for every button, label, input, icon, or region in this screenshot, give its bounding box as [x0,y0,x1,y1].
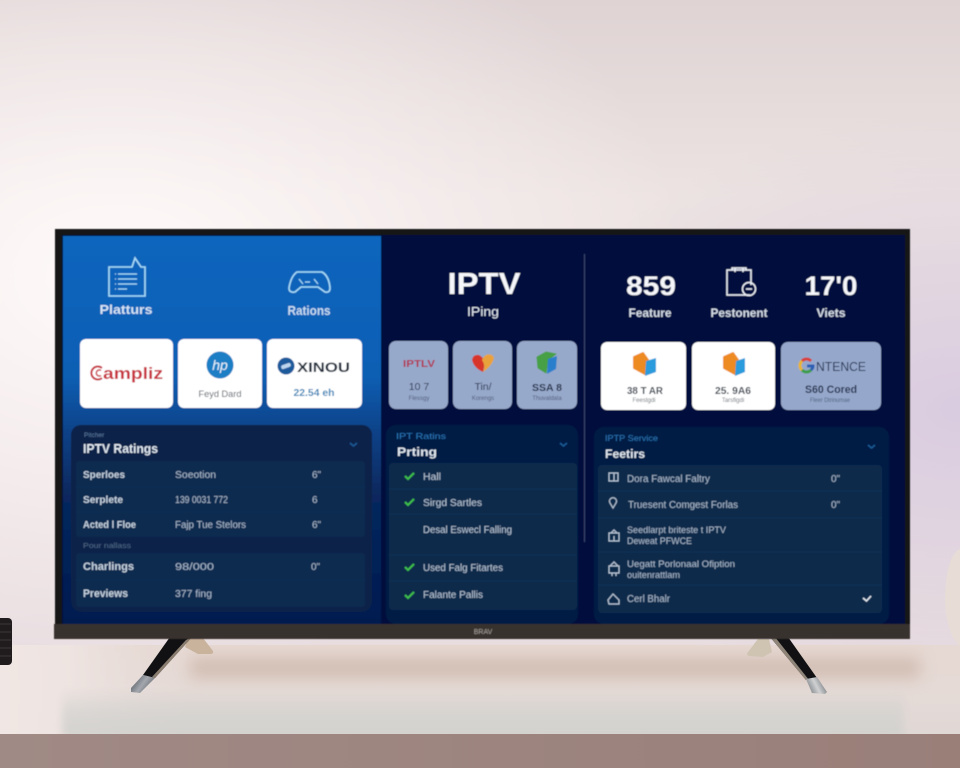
card: G NTENCE [781,342,881,410]
checklist: Used Falg Fitartes [423,563,503,574]
card: G NTENCE: S60 Cored [805,384,857,396]
label: Platfurs: Platturs [100,302,152,317]
subheading: IPing: IPing [467,304,499,319]
feature text: 0" [831,474,841,485]
table: bottom rows: Previews [83,588,128,600]
card: camplitz: ampliz [103,365,163,383]
bottom bezel strip [54,624,910,639]
label: Pestonent: Pestonent [710,306,768,320]
panel: features [594,427,889,624]
table: top rows: 6" [312,470,322,481]
card: orange logo 1: Feestgdi [632,398,656,404]
left blue column [63,236,381,624]
feature text: Cerl Bhalr [627,594,671,605]
table: bottom rows: 0" [311,562,321,573]
panel eyebrow: IPTP Service [605,433,658,443]
card: G NTENCE: NTENCE [816,360,866,374]
TV bezel [55,229,910,639]
card: blue globe logo [178,339,262,408]
table: top rows [76,461,365,537]
feature text: ouitenrattlam [627,570,680,581]
card: IPTV 107 [389,341,448,409]
panel eyebrow: IPT Ratins [396,431,446,441]
card: heart logo: Korengs [472,396,494,402]
card: green logo [517,341,577,409]
checklist: Hall [423,472,441,483]
panel: pricing [386,425,578,624]
feature text: Uegatt Porlonaal Ofiption [627,559,735,570]
white vase, right [945,549,960,646]
table: top rows: Fajp Tue Stelors [175,520,246,531]
left TV leg [131,637,213,693]
speaker puck, left [0,618,12,665]
table: top rows: Acted l Floe [83,519,136,531]
table: bottom rows: Charlings [83,561,134,573]
card: XINOU: XINOU [297,359,350,375]
feature text [627,474,841,605]
icon: platforms list [109,258,145,296]
table: top rows: Sperloes [83,469,125,481]
icon: game controller [289,272,330,292]
table: top rows: Serplete [83,494,123,506]
card: blue globe logo: Feyd Dard [198,389,242,399]
card: orange logo 2 [692,342,775,410]
stat: 17'0 Viets: Viets [816,306,846,320]
panel heading: IPTV Ratings [83,442,158,456]
divider line in screen [584,254,585,542]
card: heart logo [453,341,512,409]
TV set [54,229,910,639]
stat: 859 Feature [626,271,676,320]
checklist: Sirgd Sartles [423,498,482,509]
table: top rows: Soeotion [175,470,216,481]
checklist: Falante Pallis [423,590,483,601]
card: camplitz [80,339,173,408]
chevron [350,443,357,446]
panel: IPTV ratings [71,425,372,612]
card: orange logo 2: 25. 9A6 [715,386,751,397]
chevron [560,443,567,446]
checklist: Desal Eswecl Falling [423,525,512,536]
stat: 859 Feature: Feature [628,306,672,320]
TV brand label: BRAV [474,629,493,636]
card: G NTENCE: Fleer Dtrinumae [810,398,851,404]
shelf [0,645,960,768]
heading: IPTV: IPTV [448,266,521,301]
panel heading: Feetirs [605,449,645,461]
feature text: 0" [831,500,841,511]
card: heart logo: Tin/ [474,381,492,393]
panel eyebrow: Pitcher [84,432,105,439]
card: IPTV 107: 10 7 [409,381,429,393]
table: top rows: 6" [312,520,322,531]
stat: 859 Feature: 859 [626,271,676,301]
card: green logo: SSA 8 [532,382,562,394]
card: orange logo 2: Tarsfigdi [722,398,744,404]
label: Rations: Rations [288,303,330,318]
screen [62,235,905,624]
card: orange logo 1 [601,342,686,410]
card: blue globe logo: hp [212,357,228,373]
checklist [389,463,577,610]
right TV leg [747,637,827,694]
table: bottom rows: 377 fing [175,589,212,600]
table: top rows: 6 [312,495,318,506]
feature text: Deweat PFWCE [627,536,692,547]
table: top rows: 139 0031 772 [175,495,228,506]
feature text: Dora Fawcal Faltry [627,474,710,485]
table: bottom rows [76,553,365,607]
feature text: Truesent Comgest Forlas [628,500,738,511]
sub heading: Pour nallass [83,541,131,550]
stat: 17'0 Viets: 17'0 [804,271,858,301]
card: orange logo 1: 38 T AR [627,386,664,397]
stat: 17'0 Viets [804,271,858,320]
card: IPTV 107: Flessgy [409,396,429,402]
card: IPTV 107: IPTLV [403,358,435,370]
chevron [868,445,875,448]
card: green logo: Thuvaldala [532,396,562,402]
card: XINOU [267,339,362,408]
feature text: Seedlarpt briteste t IPTV [627,525,727,536]
card: XINOU: 22.54 eh [294,388,334,399]
feature list [598,465,882,613]
feature icons [608,473,619,604]
table: bottom rows: 98/000 [175,562,215,573]
panel heading: Prting [397,445,437,459]
check mark [863,596,871,601]
icon: clipboard [727,268,756,296]
